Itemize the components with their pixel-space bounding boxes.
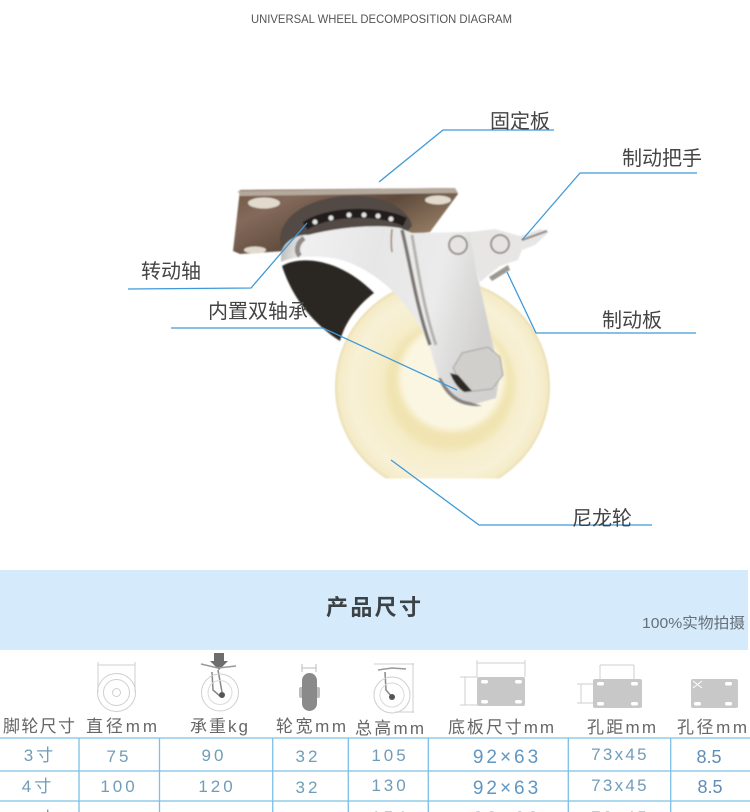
leader line: 内置双轴承 — [171, 328, 457, 390]
section banner — [0, 570, 748, 650]
axle bolt — [438, 347, 503, 406]
leader line: 制动板 — [507, 272, 696, 333]
table column headers: 直径mm — [86, 717, 157, 736]
label: 尼龙轮: 尼龙轮 — [572, 507, 632, 530]
bearing ring — [280, 196, 412, 256]
swivel fork — [281, 226, 500, 405]
mounting plate — [233, 188, 458, 254]
table row: 4寸: 100 — [100, 777, 138, 796]
leader line: 转动轴 — [128, 223, 307, 289]
table row: 3寸: 3寸 — [24, 746, 56, 765]
icon: wheel width — [299, 664, 320, 711]
table row: 4寸: 32 — [296, 778, 320, 797]
label: 内置双轴承: 内置双轴承 — [208, 300, 308, 323]
table row: 4寸: 130 — [371, 776, 409, 795]
table column headers — [3, 717, 747, 738]
table row: 4寸: 120 — [198, 777, 236, 796]
table row: 3寸: 73x45 — [591, 745, 649, 764]
table row: 4寸: 4寸 — [22, 777, 54, 796]
table column headers: 孔径mm — [677, 718, 747, 737]
banner heading: 产品尺寸 — [326, 595, 421, 620]
icon: wheel diameter — [98, 662, 136, 712]
table column headers: 底板尺寸mm — [448, 718, 554, 737]
table column headers: 孔距mm — [587, 718, 656, 737]
icon: load capacity — [201, 653, 238, 711]
table row: 3寸: 92×63 — [473, 747, 541, 768]
icon: hole diameter — [691, 679, 738, 708]
table column headers: 承重kg — [190, 717, 248, 736]
leader line: 尼龙轮 — [391, 460, 652, 525]
table column headers: 轮宽mm — [276, 717, 346, 736]
table row: 3寸: 105 — [371, 746, 409, 765]
table row: 4寸: 92×63 — [473, 778, 541, 799]
leader line: 固定板 — [379, 130, 554, 182]
brake lever — [449, 229, 549, 282]
table row: 4寸: 8.5 — [697, 777, 723, 797]
table column headers: 脚轮尺寸 — [3, 717, 75, 736]
table row: 4寸 — [22, 776, 723, 799]
icon: total height — [374, 663, 414, 713]
table row: 3寸: 75 — [107, 747, 131, 766]
table grid — [0, 738, 750, 812]
table row: 3寸 — [24, 745, 722, 768]
label: 制动把手: 制动把手 — [622, 147, 702, 170]
label: 固定板: 固定板 — [490, 110, 550, 133]
table row: 3寸: 32 — [296, 747, 320, 766]
fork inner shadow — [282, 260, 374, 341]
label: 转动轴: 转动轴 — [141, 260, 201, 283]
label: 制动板: 制动板 — [602, 309, 662, 332]
title: UNIVERSAL WHEEL DECOMPOSITION DIAGRAM — [251, 12, 512, 26]
table row: 3寸: 8.5 — [696, 747, 722, 767]
caster wheel photo — [233, 188, 550, 494]
table row: 5寸 (cut off by page edge) — [47, 810, 646, 812]
icon: base plate size — [460, 660, 525, 706]
banner note: 100%实物拍摄 — [642, 615, 745, 632]
table column headers: 总高mm — [355, 719, 424, 738]
table row: 3寸: 90 — [202, 746, 226, 765]
icon: hole spacing — [577, 665, 642, 708]
table row: 4寸: 73x45 — [591, 776, 649, 795]
nylon wheel — [335, 280, 550, 494]
leader line: 制动把手 — [522, 173, 697, 240]
